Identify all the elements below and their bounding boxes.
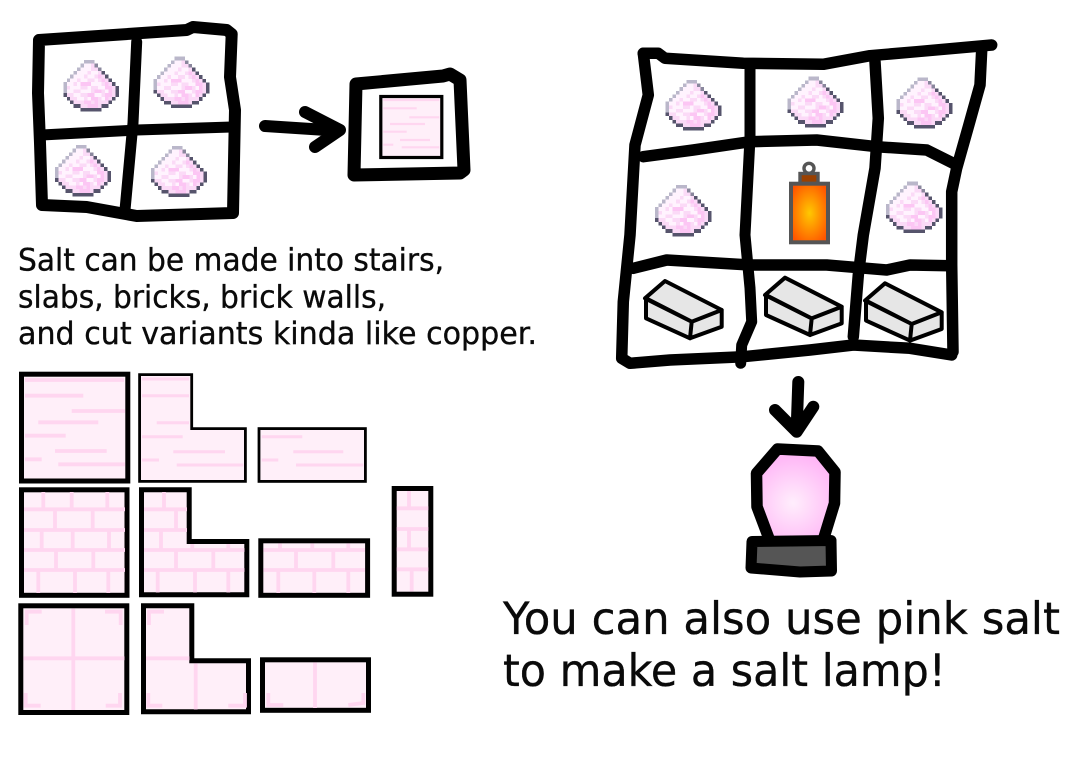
panel: salt block variants xyxy=(21,374,431,712)
text: salt variants description: and cut variants kinda like copper. xyxy=(18,316,537,352)
salt bricks xyxy=(22,490,127,595)
arrow: recipe to block xyxy=(265,112,340,147)
icon: pink salt top right xyxy=(154,57,210,108)
text: salt lamp caption: to make a salt lamp! xyxy=(503,646,946,697)
icon: brick middle xyxy=(765,278,842,335)
icon: lantern xyxy=(791,163,828,242)
lamp base xyxy=(751,540,832,572)
text: salt lamp caption: You can also use pink salt xyxy=(502,594,1060,645)
smooth salt block xyxy=(22,374,128,481)
cut salt stairs xyxy=(144,606,248,712)
cut salt slab xyxy=(262,660,368,710)
lamp crystal xyxy=(756,449,835,544)
icon: pink salt row 2 column 3 xyxy=(886,182,943,233)
smooth salt slab xyxy=(259,429,365,481)
output slot xyxy=(354,74,464,175)
salt block xyxy=(381,96,442,158)
icon: pink salt bottom right xyxy=(151,146,207,197)
text: salt variants description: Salt can be made into stairs, xyxy=(18,242,444,278)
crafting grid 2x2 xyxy=(38,27,235,216)
salt brick slab xyxy=(261,541,368,595)
panel: salt lamp crafting recipe xyxy=(622,45,992,363)
cut salt block xyxy=(21,606,127,712)
icon: pink salt row 1 column 2 xyxy=(787,77,843,127)
text: salt variants description xyxy=(18,242,537,352)
salt brick stairs xyxy=(142,490,247,595)
panel: 2x2 crafting recipe xyxy=(38,27,235,216)
panel: output slot with salt block xyxy=(354,74,464,175)
icon: salt lamp xyxy=(751,449,835,572)
icon: pink salt row 1 column 1 xyxy=(666,80,722,131)
arrow: recipe to lamp xyxy=(775,382,813,432)
icon: pink salt top left xyxy=(63,60,119,112)
smooth salt stairs xyxy=(140,375,245,481)
icon: pink salt bottom left xyxy=(55,145,111,197)
text: salt lamp caption xyxy=(502,594,1060,697)
icon: pink salt row 2 column 1 xyxy=(655,185,712,237)
icon: brick left xyxy=(645,281,722,338)
text: salt variants description: slabs, bricks, brick walls, xyxy=(18,280,386,316)
crafting grid 3x3 xyxy=(622,45,992,363)
salt brick wall xyxy=(394,488,431,594)
icon: brick right xyxy=(865,283,942,341)
icon: pink salt row 1 column 3 xyxy=(897,77,953,128)
